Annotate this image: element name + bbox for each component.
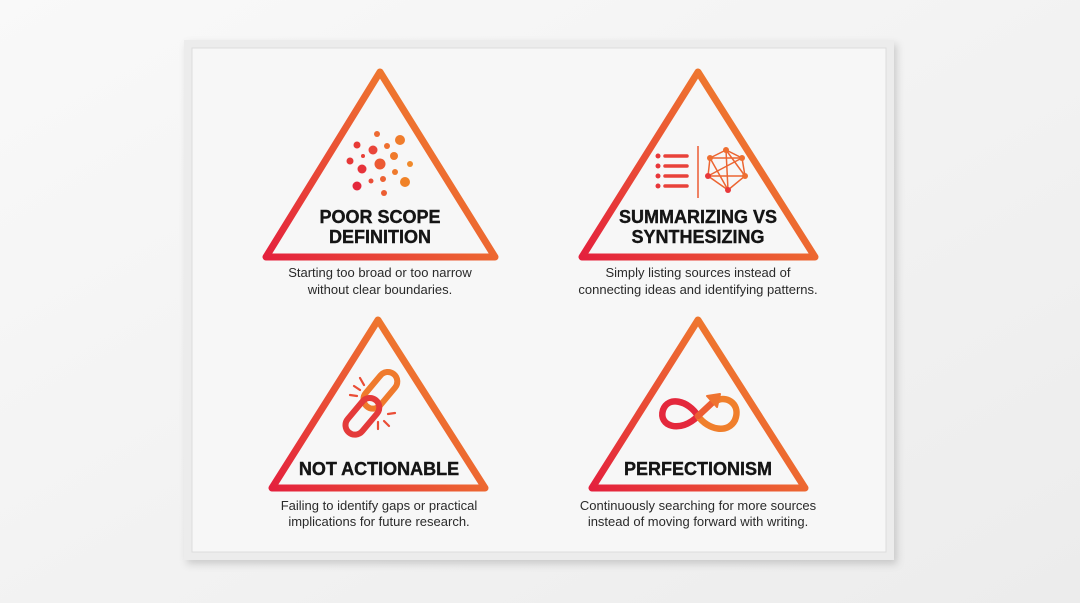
panel: poor scope definition: DEFINITION	[329, 227, 431, 247]
frame	[184, 40, 894, 560]
triangle 3	[272, 320, 485, 488]
triangle 4	[592, 320, 805, 488]
panel: perfectionism: instead of moving forward with writing.	[588, 514, 808, 529]
icon: broken chain	[342, 368, 401, 439]
icon: infinity arrow	[662, 394, 737, 429]
panel: poor scope definition	[266, 72, 495, 297]
description 1: Starting too broad or too narrow	[288, 265, 472, 280]
icon: scattered dots	[346, 131, 413, 196]
title 2: SUMMARIZING VS	[619, 207, 777, 227]
panel: perfectionism	[580, 320, 817, 529]
icon: list and network	[656, 146, 748, 198]
description 3: Failing to identify gaps or practical	[281, 498, 477, 513]
panel: summarizing vs synthesizing: connecting ideas and identifying patterns.	[578, 282, 818, 297]
description 4: Continuously searching for more sources	[580, 498, 817, 513]
description 2: Simply listing sources instead of	[606, 265, 791, 280]
triangle 1	[266, 72, 495, 257]
panel: not actionable: implications for future research.	[288, 514, 470, 529]
panel: summarizing vs synthesizing: SYNTHESIZING	[631, 227, 765, 247]
panel: summarizing vs synthesizing	[578, 72, 818, 297]
title 3: NOT ACTIONABLE	[299, 459, 459, 479]
panel: poor scope definition: without clear boundaries.	[307, 282, 452, 297]
panel: not actionable	[272, 320, 485, 529]
title 1: POOR SCOPE	[319, 207, 441, 227]
title 4: PERFECTIONISM	[624, 459, 772, 479]
triangle 2	[582, 72, 815, 257]
